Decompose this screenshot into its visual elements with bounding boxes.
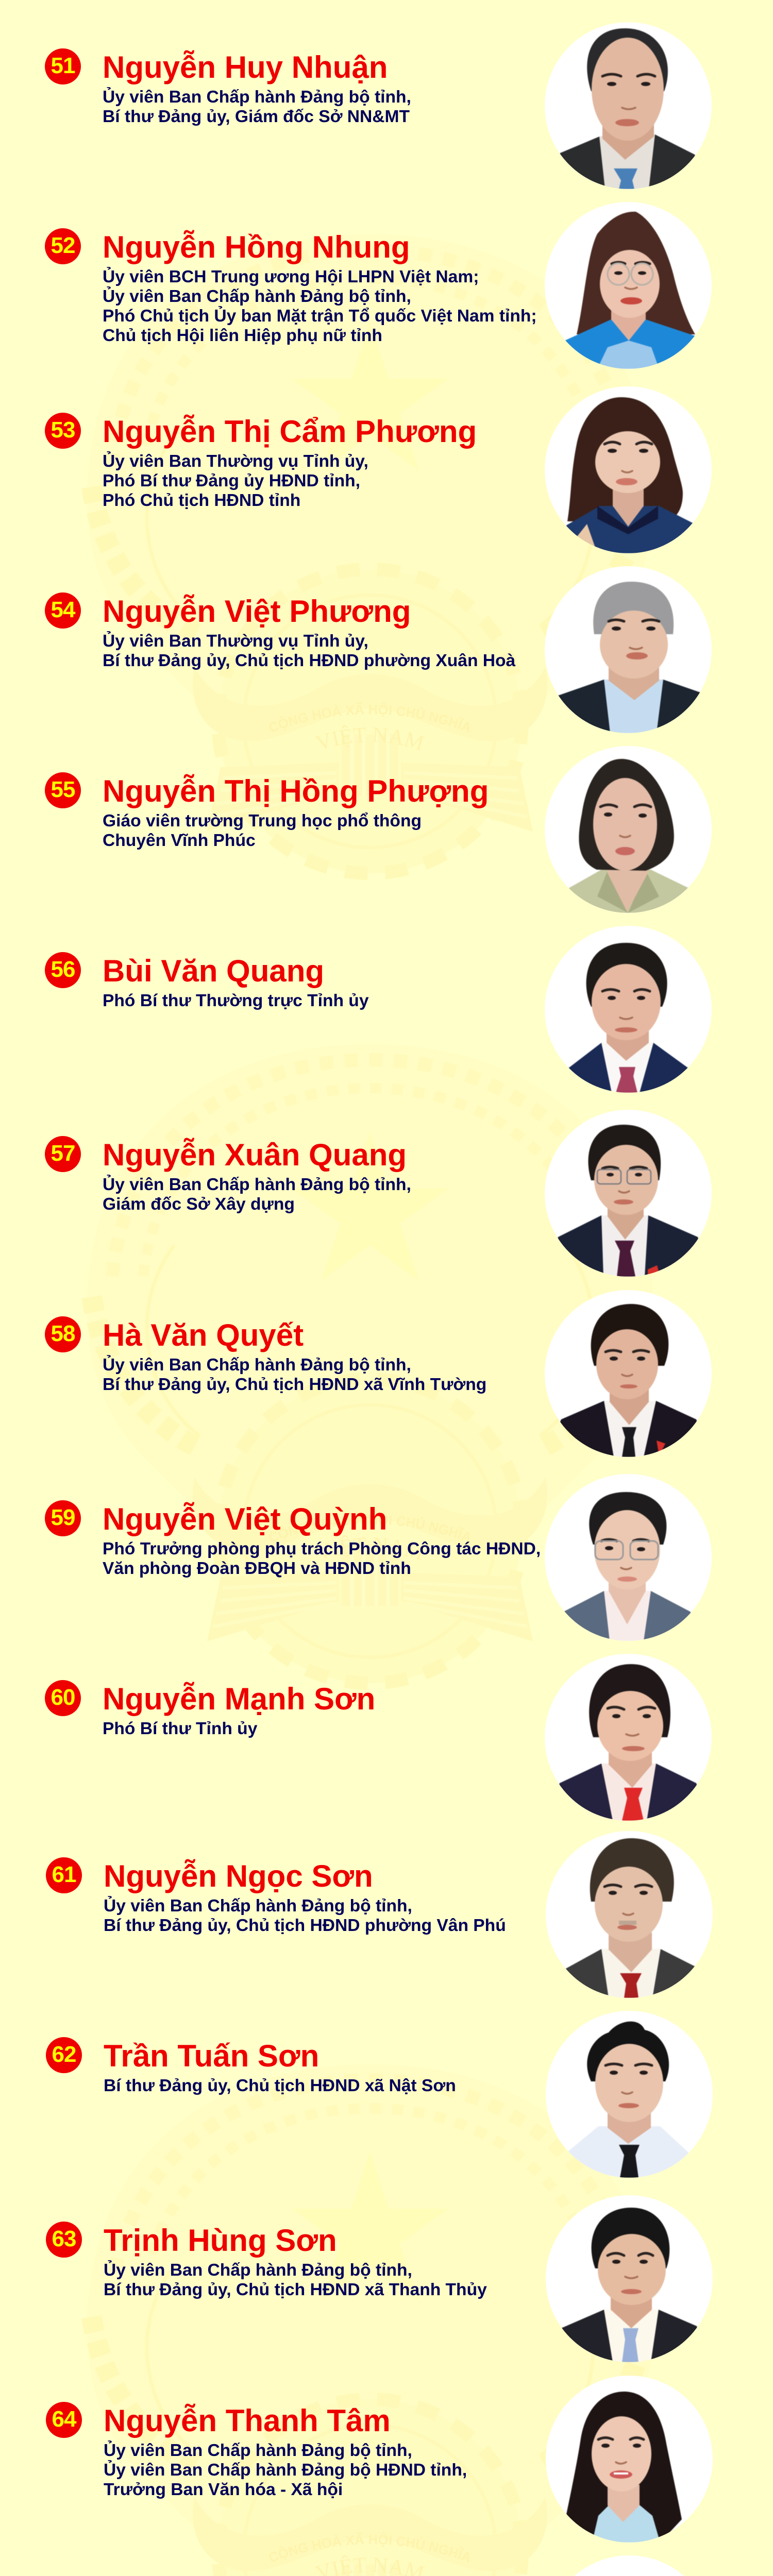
- name: Nguyễn Thị Cẩm Phương: [103, 414, 477, 449]
- name: Trịnh Hùng Sơn: [104, 2223, 337, 2258]
- role: Phó Bí thư Thường trực Tỉnh ủy: [103, 991, 369, 1010]
- number badge 51: [45, 48, 81, 84]
- portrait 53: [545, 386, 712, 553]
- number badge 51: 51: [51, 53, 75, 78]
- portrait 52: [545, 202, 712, 369]
- portrait 63: [546, 2195, 713, 2362]
- panel: member 57: [45, 1110, 712, 1277]
- role: Ủy viên Ban Chấp hành Đảng bộ tỉnh, Bí thư Đảng ủy, Chủ tịch HĐND xã Thanh Thủy: [104, 2261, 487, 2299]
- role: Ủy viên BCH Trung ương Hội LHPN Việt Nam; Ủy viên Ban Chấp hành Đảng bộ tỉnh, Phó Chủ tịch Ủy ban Mặt trận Tổ quốc Việt Nam tỉnh; Chủ tịch Hội liên Hiệp phụ nữ tỉnh: [103, 267, 537, 345]
- number badge 62: 62: [52, 2042, 76, 2067]
- name: Hà Văn Quyết: [103, 1318, 304, 1352]
- role: Giáo viên trường Trung học phổ thông Chuyên Vĩnh Phúc: [103, 811, 422, 850]
- number badge 60: [45, 1680, 81, 1716]
- number badge 63: 63: [52, 2226, 76, 2251]
- emblem watermark 1: CỘNG HOÀ XÃ HỘI CHỦ NGHĨA: [269, 702, 469, 733]
- portrait 64: [546, 2376, 713, 2543]
- portrait 58: [545, 1290, 712, 1457]
- role: Ủy viên Ban Chấp hành Đảng bộ tỉnh, Ủy viên Ban Chấp hành Đảng bộ HĐND tỉnh, Trưởng Ban Văn hóa - Xã hội: [104, 2441, 467, 2499]
- number badge 53: [45, 413, 81, 449]
- role: Ủy viên Ban Chấp hành Đảng bộ tỉnh, Bí thư Đảng ủy, Giám đốc Sở NN&MT: [103, 88, 411, 126]
- name: Bùi Văn Quang: [103, 954, 324, 988]
- number badge 61: [46, 1857, 82, 1893]
- panel: member 55: [45, 746, 712, 913]
- name: Nguyễn Mạnh Sơn: [103, 1682, 375, 1716]
- panel: member 63: [46, 2195, 713, 2362]
- panel: member 59: [45, 1474, 712, 1641]
- name: Nguyễn Việt Quỳnh: [103, 1502, 387, 1536]
- name: Nguyễn Xuân Quang: [103, 1138, 407, 1172]
- number badge 58: 58: [51, 1321, 75, 1346]
- name: Nguyễn Thị Hồng Phượng: [103, 774, 489, 808]
- emblem watermark 2: VIỆT NAM: [315, 1535, 425, 1560]
- number badge 53: 53: [51, 417, 75, 443]
- name: Nguyễn Huy Nhuận: [103, 50, 388, 84]
- role: Ủy viên Ban Chấp hành Đảng bộ tỉnh, Bí thư Đảng ủy, Chủ tịch HĐND phường Vân Phú: [104, 1896, 506, 1935]
- portrait 54: [545, 566, 712, 733]
- number badge 59: 59: [51, 1505, 75, 1530]
- name: Nguyễn Việt Phương: [103, 594, 411, 629]
- emblem watermark 1: [81, 243, 639, 880]
- role: Ủy viên Ban Thường vụ Tỉnh ủy, Bí thư Đảng ủy, Chủ tịch HĐND phường Xuân Hoà: [103, 632, 515, 670]
- number badge 62: [46, 2037, 82, 2073]
- role: Phó Bí thư Tỉnh ủy: [103, 1719, 257, 1738]
- portrait 56: [545, 926, 712, 1093]
- panel: member 52: [45, 202, 712, 369]
- number badge 56: [45, 952, 81, 988]
- number badge 57: 57: [51, 1141, 75, 1166]
- panel: member 51: [45, 22, 712, 189]
- emblem watermark 2: [81, 1053, 623, 1690]
- portrait 60: [545, 1654, 712, 1821]
- panel: member 56: [45, 926, 712, 1093]
- name: Nguyễn Hồng Nhung: [103, 230, 410, 264]
- portrait 57: [545, 1110, 712, 1277]
- portrait 59: [545, 1474, 712, 1641]
- name: Nguyễn Ngọc Sơn: [104, 1859, 373, 1893]
- role: Bí thư Đảng ủy, Chủ tịch HĐND xã Nật Sơn: [104, 2076, 456, 2095]
- panel: member 58: [45, 1290, 712, 1457]
- number badge 52: [45, 228, 81, 264]
- number badge 58: [45, 1316, 81, 1352]
- number badge 64: 64: [52, 2406, 76, 2432]
- role: Ủy viên Ban Thường vụ Tỉnh ủy, Phó Bí thư Đảng ủy HĐND tỉnh, Phó Chủ tịch HĐND tỉnh: [103, 452, 368, 510]
- number badge 63: [46, 2222, 82, 2258]
- role: Phó Trưởng phòng phụ trách Phòng Công tác HĐND, Văn phòng Đoàn ĐBQH và HĐND tỉnh: [103, 1539, 541, 1578]
- number badge 54: [45, 592, 81, 629]
- number badge 61: 61: [52, 1862, 76, 1887]
- portrait 62: [546, 2011, 713, 2178]
- panel: member 62: [46, 2011, 713, 2178]
- number badge 64: [46, 2402, 82, 2438]
- portrait 61: [546, 1831, 713, 1998]
- portrait 51: [545, 22, 712, 189]
- panel: member 61: [46, 1831, 713, 1998]
- panel: member 53: [45, 386, 712, 553]
- portrait 65: [546, 2555, 713, 2576]
- number badge 60: 60: [51, 1685, 75, 1710]
- panel: member 60: [45, 1654, 712, 1821]
- emblem watermark 1: VIỆT NAM: [315, 725, 425, 750]
- panel: member 64: [46, 2376, 713, 2543]
- number badge 55: [45, 772, 81, 808]
- role: Ủy viên Ban Chấp hành Đảng bộ tỉnh, Bí thư Đảng ủy, Chủ tịch HĐND xã Vĩnh Tường: [103, 1355, 486, 1394]
- panel: member 54: [45, 566, 712, 733]
- portrait 55: [545, 746, 712, 913]
- number badge 54: 54: [51, 597, 75, 622]
- panel: member 65: [574, 2555, 684, 2576]
- emblem watermark 2: CỘNG HOÀ XÃ HỘI CHỦ NGHĨA: [269, 1512, 469, 1541]
- emblem watermark 3: CỘNG HOÀ XÃ HỘI CHỦ NGHĨA: [269, 2532, 469, 2563]
- number badge 56: 56: [51, 957, 75, 982]
- name: Trần Tuấn Sơn: [104, 2039, 319, 2073]
- number badge 57: [45, 1136, 81, 1172]
- number badge 59: [45, 1500, 81, 1536]
- number badge 55: 55: [51, 777, 75, 802]
- name: Nguyễn Thanh Tâm: [104, 2403, 391, 2438]
- role: Ủy viên Ban Chấp hành Đảng bộ tỉnh, Giám đốc Sở Xây dựng: [103, 1175, 411, 1214]
- emblem watermark 3: [81, 2073, 645, 2576]
- number badge 52: 52: [51, 233, 75, 258]
